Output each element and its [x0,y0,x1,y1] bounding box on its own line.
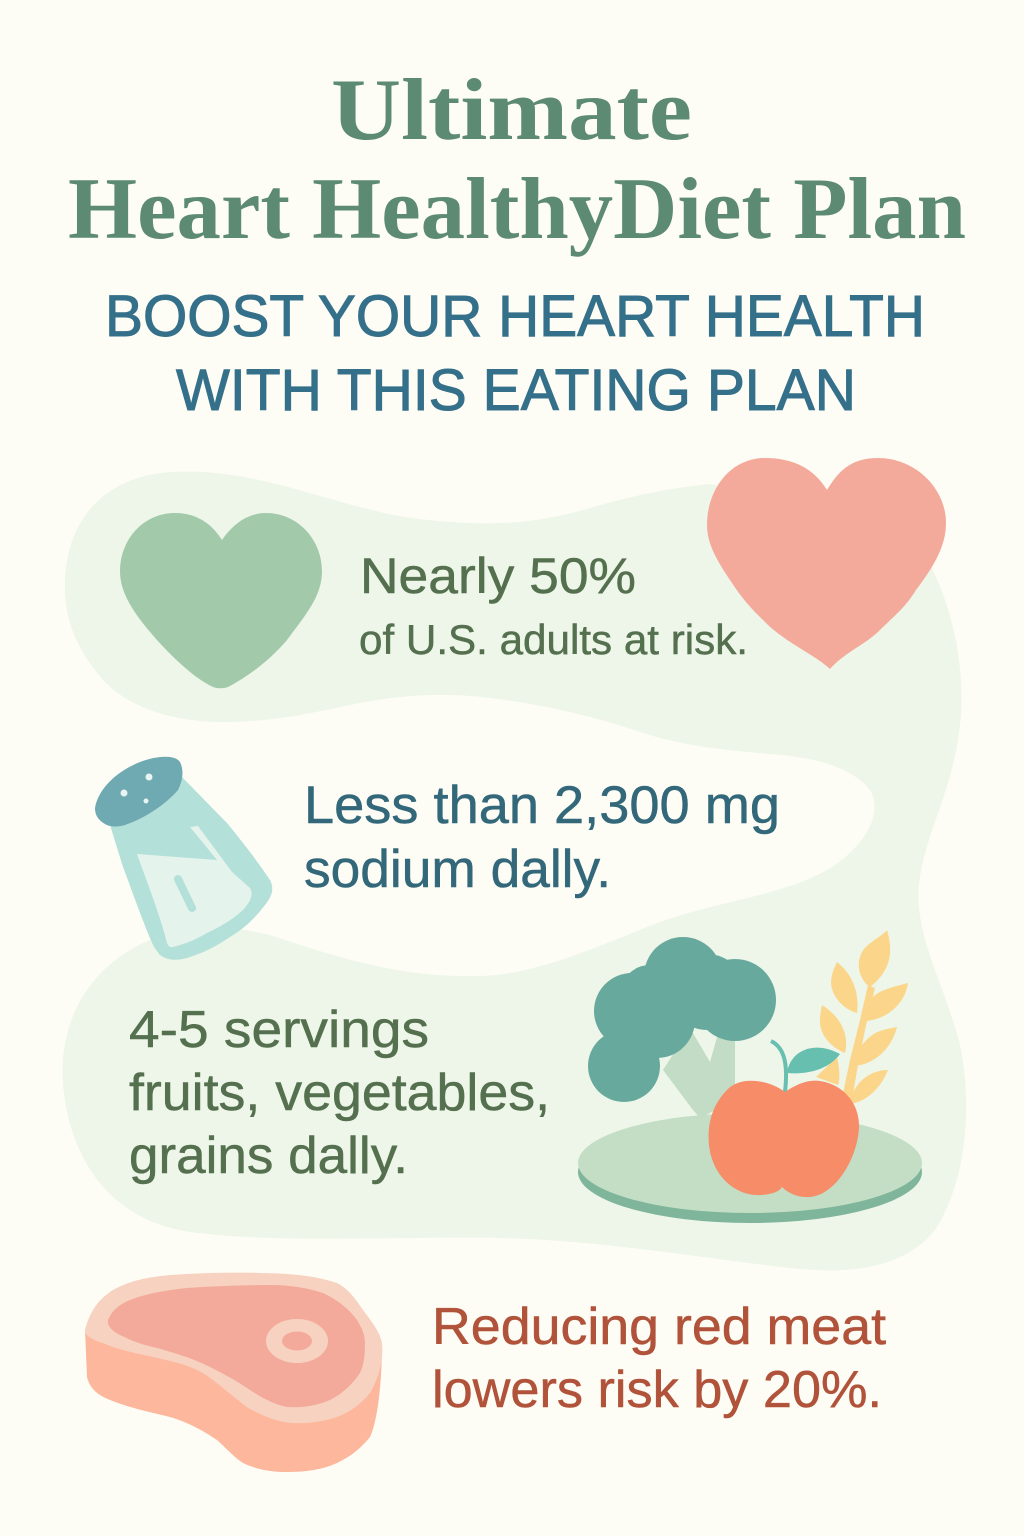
stat: servings [129,1001,550,1185]
icon: steak [85,1273,382,1472]
stat: red meat [432,1298,887,1419]
stat: sodium limit [304,776,780,899]
icon: green heart [120,513,322,688]
stat: servings: fruits, vegetables, [129,1064,550,1122]
icon: food plate with broccoli, apple and wheat [578,930,922,1223]
title: Ultimate [331,62,692,159]
stat: at-risk adults [359,548,748,663]
stat: sodium limit: Less than 2,300 mg [304,776,780,835]
background blob [62,471,966,1270]
icon: pink heart [707,458,946,669]
broccoli [588,937,776,1118]
title [68,62,966,258]
stat: servings: grains dally. [129,1127,408,1185]
subtitle: BOOST YOUR HEART HEALTH [105,284,925,349]
plate [578,1113,922,1223]
stat: at-risk adults: of U.S. adults at risk. [359,616,748,663]
stat: sodium limit: sodium dally. [304,840,611,899]
stat: servings: 4-5 servings [129,1001,429,1059]
title: Heart HealthyDiet Plan [68,161,966,258]
stat: red meat: lowers risk by 20%. [432,1361,882,1419]
apple [709,1041,859,1197]
stat: at-risk adults: Nearly 50% [360,548,636,604]
subtitle [105,284,925,423]
stat: red meat: Reducing red meat [432,1298,887,1356]
subtitle: WITH THIS EATING PLAN [176,358,856,423]
wheat [816,930,908,1104]
icon: salt shaker [95,757,272,960]
